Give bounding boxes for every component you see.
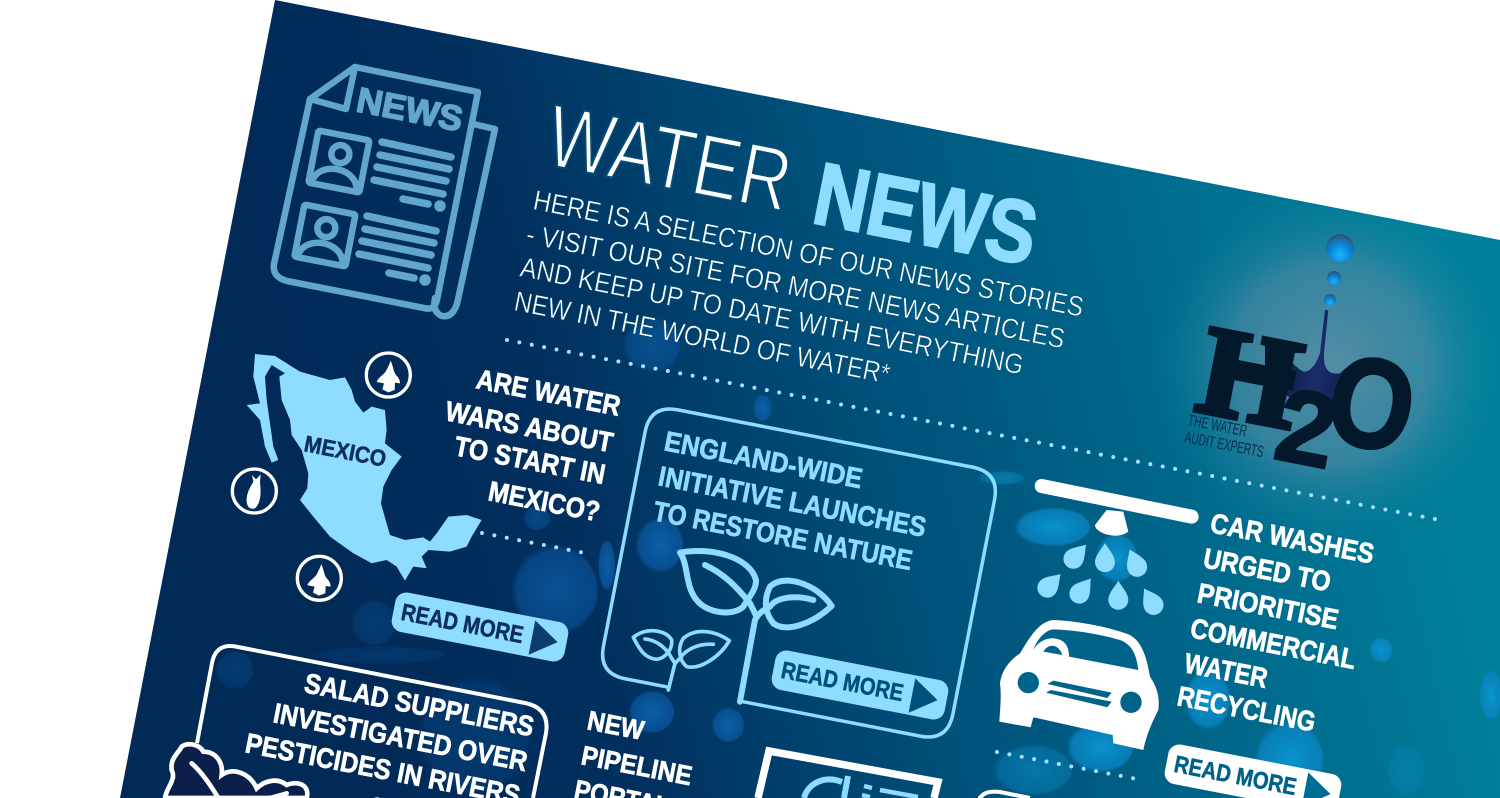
logo: H2O: AUDIT EXPERTS — [1183, 429, 1265, 461]
panel outline — [197, 646, 547, 798]
headline: INVESTIGATED OVER — [271, 697, 530, 777]
intro text: - VISIT OUR SITE FOR MORE NEWS ARTICLES — [524, 218, 1068, 354]
title — [539, 85, 1045, 284]
headline: WATER — [1182, 647, 1270, 694]
intro text — [512, 184, 1086, 389]
panel: lower right box corner — [978, 792, 1030, 798]
headline — [243, 667, 536, 798]
map of Mexico: MEXICO — [302, 430, 388, 472]
logo: H2O: THE WATER — [1186, 412, 1248, 440]
icon: sprayer bar and water drops — [1033, 486, 1192, 619]
panel outline — [598, 405, 1000, 741]
background water droplets — [213, 317, 1500, 798]
icon: plant seedlings — [633, 551, 832, 702]
intro text: AND KEEP UP TO DATE WITH EVERYTHING — [518, 251, 1026, 380]
intro text: NEW IN THE WORLD OF WATER* — [512, 285, 893, 389]
headline: TO RESTORE NATURE — [651, 495, 915, 576]
headline: PRIORITISE — [1195, 577, 1341, 635]
title: WATER — [539, 85, 800, 230]
read more button: READ MORE — [779, 657, 906, 707]
headline: PIPELINE — [579, 740, 695, 791]
title: NEWS — [806, 143, 1045, 284]
read more button: READ MORE — [399, 599, 526, 649]
logo: H2O: O — [1317, 326, 1427, 481]
headline: ENGLAND-WIDE — [662, 425, 865, 494]
headline: NEW — [585, 705, 647, 746]
panel: car wash story — [999, 486, 1377, 798]
panel: new pipeline portal — [572, 705, 938, 798]
icon: lettuce — [165, 744, 307, 798]
icon: newspaper — [274, 67, 495, 316]
icons: fighter jets and bomb — [232, 353, 410, 600]
panel: salad suppliers — [165, 646, 547, 798]
panel: Mexico story — [232, 353, 623, 663]
headline: RECYCLING — [1175, 680, 1318, 738]
icon: car — [999, 620, 1159, 750]
map of Mexico — [247, 354, 482, 581]
headline — [572, 705, 695, 798]
intro text: HERE IS A SELECTION OF OUR NEWS STORIES — [531, 184, 1086, 323]
headline — [443, 363, 623, 527]
logo: H2O — [1183, 234, 1427, 492]
headline — [651, 425, 929, 576]
headline: COMMERCIAL — [1188, 612, 1359, 675]
dotted dividers — [482, 340, 1440, 780]
logo: H2O: H — [1188, 298, 1312, 456]
icon: computer monitor — [758, 751, 938, 798]
headline: MEXICO? — [486, 475, 603, 527]
logo: H2O: 2 — [1267, 366, 1346, 492]
read more button — [770, 649, 950, 721]
read more button — [390, 591, 570, 663]
headline: ARE WATER — [474, 363, 623, 422]
headline: URGED TO — [1201, 542, 1333, 598]
headline: TO START IN — [452, 430, 608, 490]
headline: SALAD SUPPLIERS — [302, 667, 536, 742]
headline: INITIATIVE LAUNCHES — [656, 460, 929, 543]
headline: CAR WASHES — [1208, 507, 1377, 570]
headline: WARS ABOUT — [443, 395, 616, 458]
headline — [1175, 507, 1377, 738]
newspaper masthead: NEWS — [353, 81, 466, 139]
panel: England initiative — [598, 405, 1000, 741]
